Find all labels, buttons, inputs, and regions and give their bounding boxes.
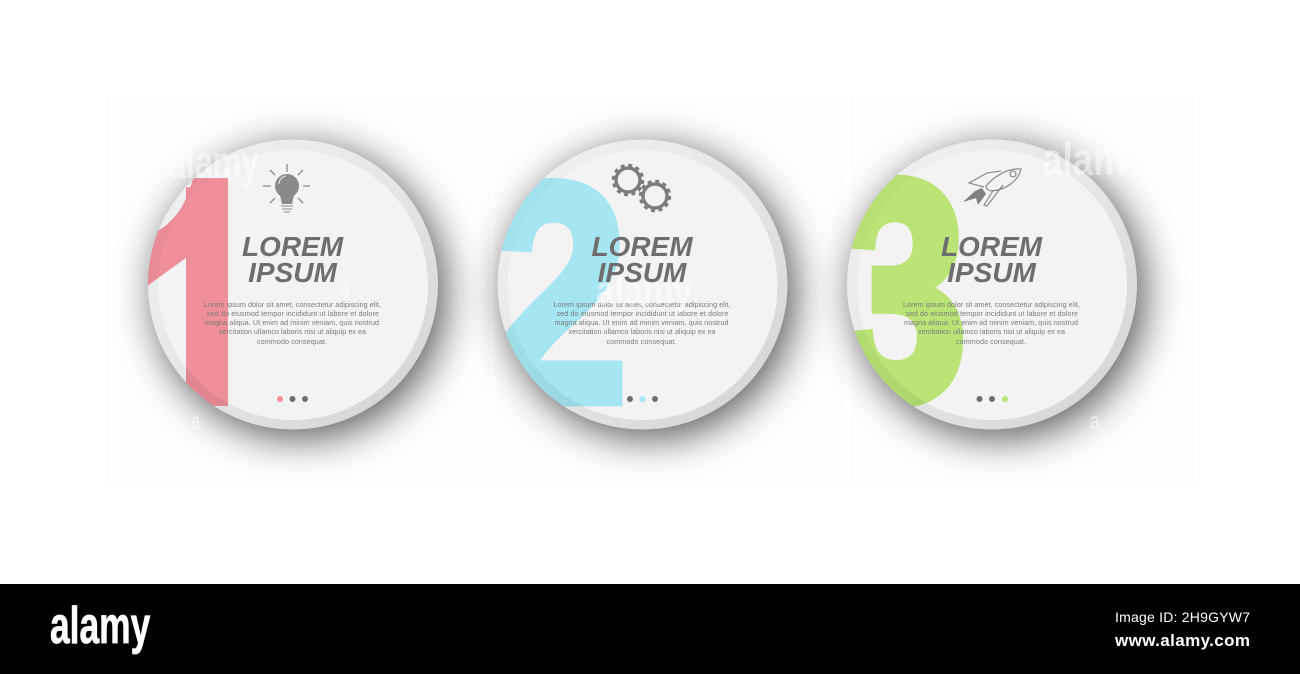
big numeral 1 xyxy=(148,178,228,406)
big numeral 2: 2 xyxy=(480,119,629,468)
heading 2 xyxy=(591,231,693,288)
body text 1: commodo consequat. xyxy=(257,337,327,346)
body text 2: magna aliqua. Ut enim ad minim veniam, quis nostrud xyxy=(554,318,728,327)
heading 1: LOREM xyxy=(242,231,344,262)
circle shadow 3 xyxy=(854,148,1144,438)
watermarks: alamy xyxy=(168,137,259,188)
panel: step 2 xyxy=(480,119,794,468)
body text 1: sed do eiusmod tempor incididunt ut labore et dolore xyxy=(207,309,379,318)
heading 1 xyxy=(242,231,344,288)
circle shadow 2 xyxy=(504,148,794,438)
heading 1: IPSUM xyxy=(248,257,338,288)
body text 3: Lorem ipsum dolor sit amet, consectetur adipiscing elit, xyxy=(903,300,1080,309)
panel: step 3 xyxy=(827,118,1144,464)
watermarks xyxy=(168,133,1126,435)
watermarks: alam xyxy=(1042,133,1126,185)
circle ring 2 xyxy=(498,140,788,430)
pagination dots 3 xyxy=(976,396,1008,402)
watermarks: a xyxy=(340,275,350,302)
heading 3: LOREM xyxy=(941,231,1043,262)
body text 2: commodo consequat. xyxy=(606,337,676,346)
body text 3: sed do eiusmod tempor incididunt ut labore et dolore xyxy=(906,309,1078,318)
big numeral 3: 3 xyxy=(827,118,967,464)
pagination dots 1 xyxy=(277,396,308,402)
body text 3: magna aliqua. Ut enim ad minim veniam, quis nostrud xyxy=(904,318,1078,327)
circle disc 1 xyxy=(158,150,428,420)
heading 2: LOREM xyxy=(591,231,693,262)
panel: step 1 xyxy=(109,119,445,474)
body text 2: xercitation ullamco laboris nisi ut aliquip ex ea xyxy=(568,327,716,336)
body text 3: commodo consequat. xyxy=(956,337,1026,346)
body text 1: xercitation ullamco laboris nisi ut aliquip ex ea xyxy=(219,327,366,336)
pagination dots 2 xyxy=(627,396,658,402)
circle ring 1 xyxy=(148,140,438,430)
heading 3: IPSUM xyxy=(947,257,1037,288)
watermarks: alamy xyxy=(596,267,693,313)
heading 2: IPSUM xyxy=(598,257,687,288)
body text 2: Lorem ipsum dolor sit amet, consectetur adipiscing elit, xyxy=(554,300,730,309)
big numeral 1: 1 xyxy=(109,119,286,474)
watermarks: a xyxy=(1090,408,1100,435)
body text 3 xyxy=(903,300,1080,346)
icon: rocket xyxy=(963,169,1021,206)
footer bar xyxy=(0,584,1300,674)
image id: Image ID: 2H9GYW7 xyxy=(1115,609,1250,625)
body text 1 xyxy=(204,300,381,346)
circle disc 3 xyxy=(857,150,1127,420)
watermarks: a xyxy=(191,408,201,435)
body text 2: sed do eiusmod tempor incididunt ut labore et dolore xyxy=(556,309,728,318)
website: www.alamy.com xyxy=(1114,631,1250,650)
circle shadow 1 xyxy=(155,148,445,438)
body text 1: magna aliqua. Ut enim ad minim veniam, quis nostrud xyxy=(205,318,379,327)
circle ring 3 xyxy=(847,140,1137,430)
icon: light bulb xyxy=(263,164,310,212)
body text 2 xyxy=(554,300,730,346)
body text 1: Lorem ipsum dolor sit amet, consectetur adipiscing elit, xyxy=(204,300,381,309)
circle disc 2 xyxy=(508,150,778,420)
body text 3: xercitation ullamco laboris nisi ut aliquip ex ea xyxy=(918,327,1065,336)
icon: gears xyxy=(614,166,670,210)
heading 3 xyxy=(941,231,1043,288)
alamy logo: alamy xyxy=(50,597,150,655)
